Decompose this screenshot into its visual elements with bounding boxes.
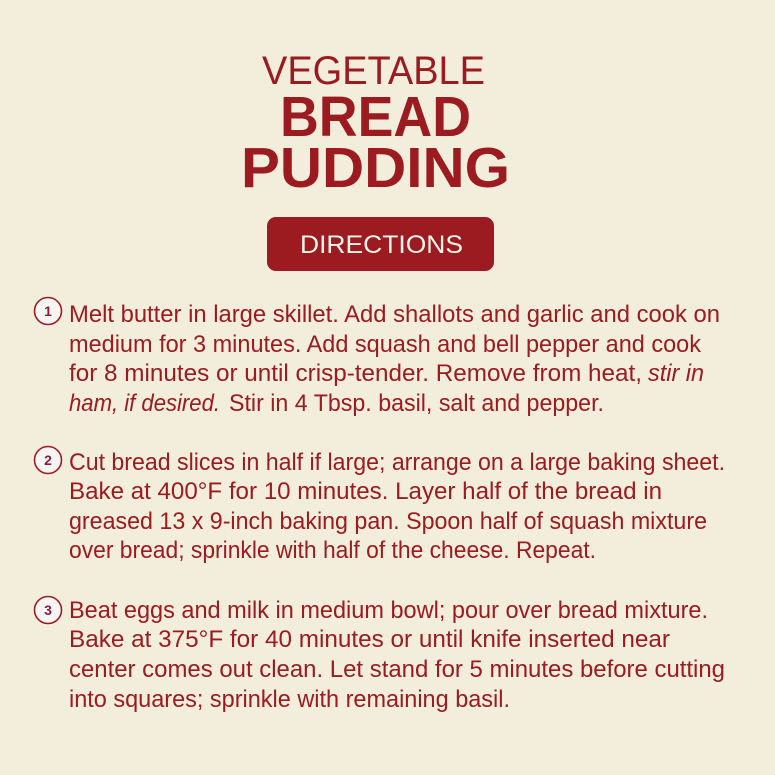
step 2 number icon: 2 (44, 452, 52, 468)
directions badge: DIRECTIONS (300, 231, 463, 259)
step 3 text: into squares; sprinkle with remaining basil. (69, 686, 510, 713)
step 2 (34, 446, 725, 564)
step 1 text: for 8 minutes or until crisp-tender. Remove from heat, (69, 360, 642, 387)
step 1 text: stir in (648, 360, 704, 387)
step 2 text: over bread; sprinkle with half of the cheese. Repeat. (69, 537, 596, 564)
step 2 text: greased 13 x 9-inch baking pan. Spoon half of squash mixture (69, 508, 707, 535)
step 3 (34, 596, 725, 713)
step 2 text: Cut bread slices in half if large; arrange on a large baking sheet. (69, 449, 725, 476)
step 2 text: Bake at 400°F for 10 minutes. Layer half of the bread in (69, 478, 662, 505)
step 1 number icon: 1 (44, 303, 52, 319)
step 1 text: Stir in 4 Tbsp. basil, salt and pepper. (229, 390, 604, 417)
directions badge (267, 217, 494, 271)
step 3 text: Beat eggs and milk in medium bowl; pour over bread mixture. (69, 597, 708, 624)
step 1 (34, 298, 720, 417)
step 2 text (69, 449, 725, 564)
step 1 number icon (34, 298, 62, 324)
title: VEGETABLE (262, 49, 485, 93)
step 3 number icon: 3 (44, 602, 52, 618)
step 3 text (69, 597, 725, 713)
step 3 text: Bake at 375°F for 40 minutes or until knife inserted near (69, 626, 670, 653)
title: PUDDING (241, 136, 510, 200)
title: BREAD (280, 85, 471, 149)
step 1 text (69, 301, 720, 417)
step 3 text: center comes out clean. Let stand for 5 minutes before cutting (69, 656, 725, 683)
step 2 number icon (34, 446, 62, 474)
step 1 text: ham, if desired. (69, 390, 220, 417)
step 1 text: medium for 3 minutes. Add squash and bell pepper and cook (69, 331, 702, 358)
title (241, 49, 510, 200)
step 1 text: Melt butter in large skillet. Add shallots and garlic and cook on (69, 301, 720, 328)
step 3 number icon (34, 596, 62, 624)
